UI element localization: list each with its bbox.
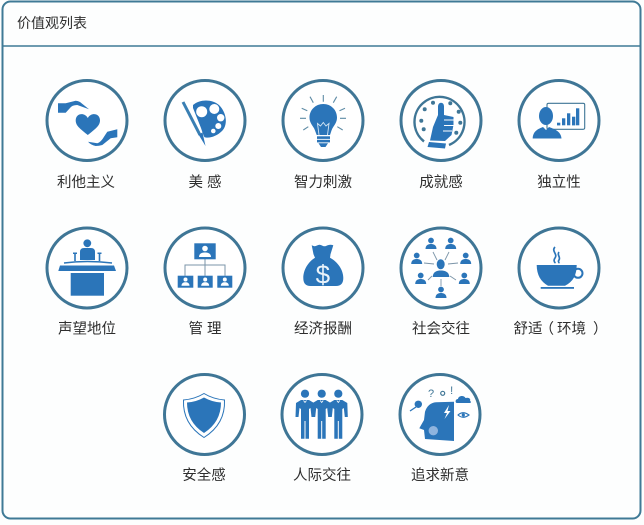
icon: coffee cup [519,228,599,308]
icon: thinking head: ? [428,388,434,400]
icon: thinking head: ! [450,385,453,397]
icon: speaker at podium [47,228,127,308]
label: 美 感 [188,174,222,191]
icon: shield [164,374,244,454]
label: 管 理 [188,320,222,338]
label: 独立性 [537,174,581,191]
item: economic reward [283,228,363,338]
icon: palette and brush [165,80,245,160]
header divider [3,45,640,47]
label: 经济报酬 [294,320,352,338]
item: altruism [47,80,127,191]
icon: people network [401,228,481,308]
icon: three businessmen [282,374,362,454]
icon: thinking head [400,374,480,454]
label: 声望地位 [58,320,116,338]
item: social interaction [401,228,481,338]
item: aesthetics [165,80,245,191]
item: sense of security [164,374,244,484]
title: 价值观列表 [17,15,87,31]
icon: org chart [165,228,245,308]
item: interpersonal relations [282,374,362,484]
label: 人际交往 [293,466,351,484]
icon: presenter with chart [519,80,599,160]
label: 追求新意 [411,466,469,484]
icon: light bulb [283,80,363,160]
label: 利他主义 [57,174,115,191]
item: sense of achievement [401,80,481,191]
label: 成就感 [419,174,463,191]
label: 舒适（环境 ） [514,320,608,338]
label: 安全感 [182,466,226,484]
item: management [165,228,245,338]
item: independence [519,80,599,191]
item: status [47,228,127,338]
icon: hands holding heart [47,80,127,160]
label: 社会交往 [412,320,470,338]
icon: money bag: $ [316,260,331,290]
item: comfort environment [514,228,608,338]
item: intellectual stimulation [283,80,363,191]
item: pursuit of novelty [400,374,480,484]
icon: thumbs up with stars [401,80,481,160]
label: 智力刺激 [294,174,352,191]
